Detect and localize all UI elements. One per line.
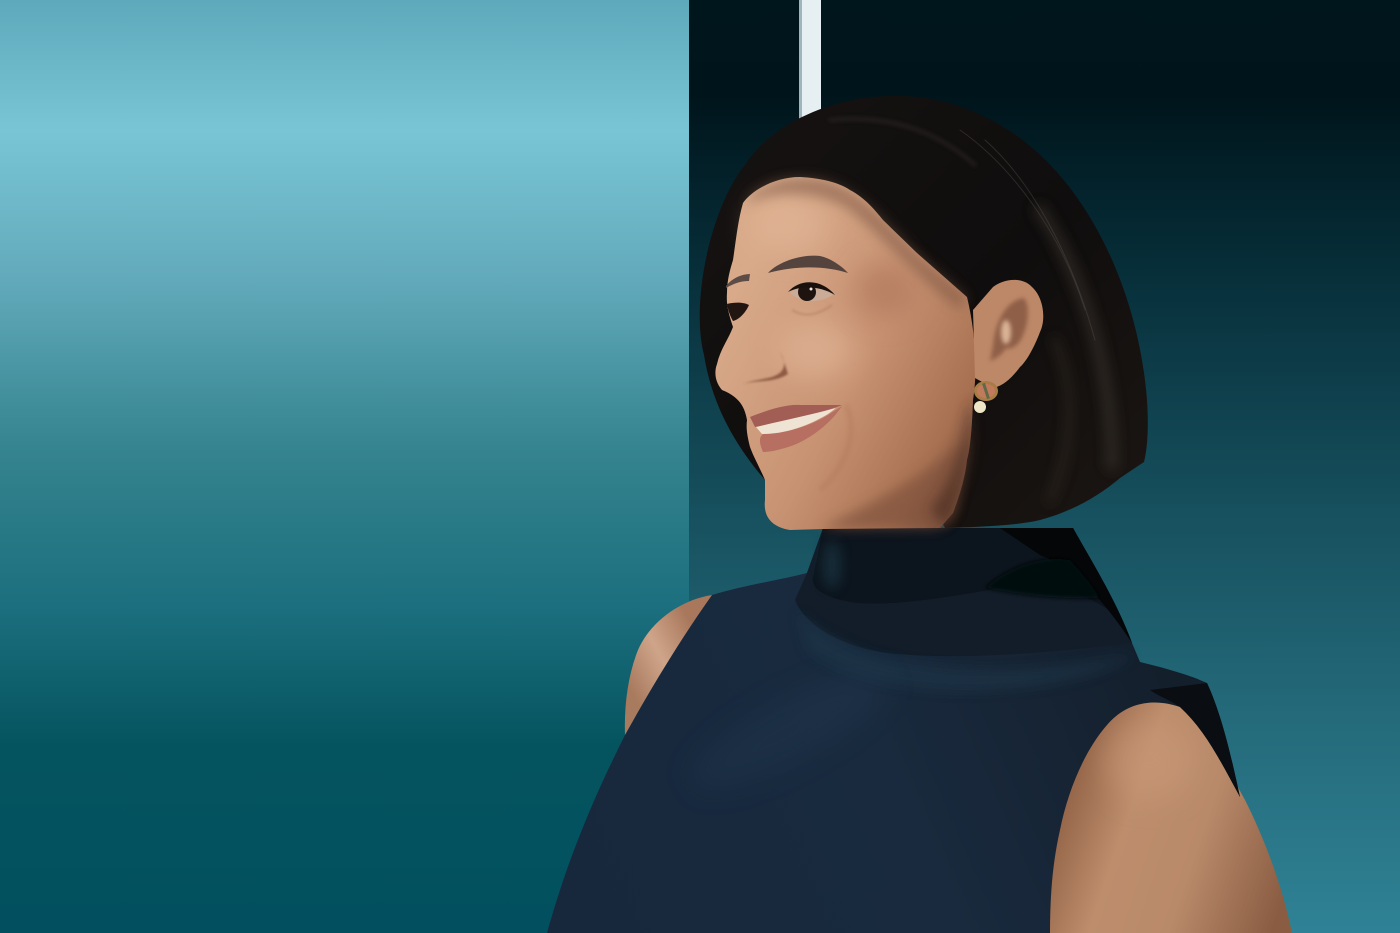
- under-eye crease: [792, 305, 832, 315]
- near eye: [788, 282, 835, 301]
- lips: [750, 405, 842, 452]
- jaw edge shadow: [930, 400, 972, 527]
- inner ear: [990, 298, 1028, 362]
- collar inner fold: [813, 528, 1112, 612]
- left arm: [625, 595, 712, 735]
- smile crease: [820, 405, 851, 490]
- collar teal sheen: [822, 541, 842, 589]
- temple flush: [853, 262, 917, 318]
- cheek light: [777, 320, 853, 380]
- nose wing shadow: [743, 352, 788, 384]
- right arm: [1049, 700, 1292, 933]
- left light teal panel: [0, 0, 689, 933]
- dress: [547, 528, 1240, 933]
- woman portrait: [547, 96, 1292, 933]
- chest sheen: [679, 652, 901, 808]
- ear light: [1001, 320, 1011, 344]
- near eyebrow: [768, 256, 848, 273]
- ear: [973, 280, 1043, 388]
- neck shadow: [820, 440, 965, 529]
- forehead light: [752, 197, 828, 253]
- collar outer fold: [795, 528, 1132, 656]
- hair streaks: [830, 119, 1112, 500]
- far eyebrow: [726, 274, 750, 288]
- vertical light strip: [799, 0, 821, 122]
- dress fold sheen: [798, 612, 1135, 690]
- collar deep shadow: [1000, 528, 1132, 643]
- hairline shadow: [745, 178, 967, 310]
- hair back: [700, 96, 1148, 528]
- far eye: [727, 303, 749, 321]
- right dark background panel: [688, 0, 1400, 933]
- earring: [974, 381, 998, 413]
- face and neck: [715, 177, 975, 530]
- arm highlight: [1105, 720, 1195, 800]
- shadowed collar pocket: [985, 559, 1100, 598]
- sleeve dark rim: [1150, 683, 1240, 797]
